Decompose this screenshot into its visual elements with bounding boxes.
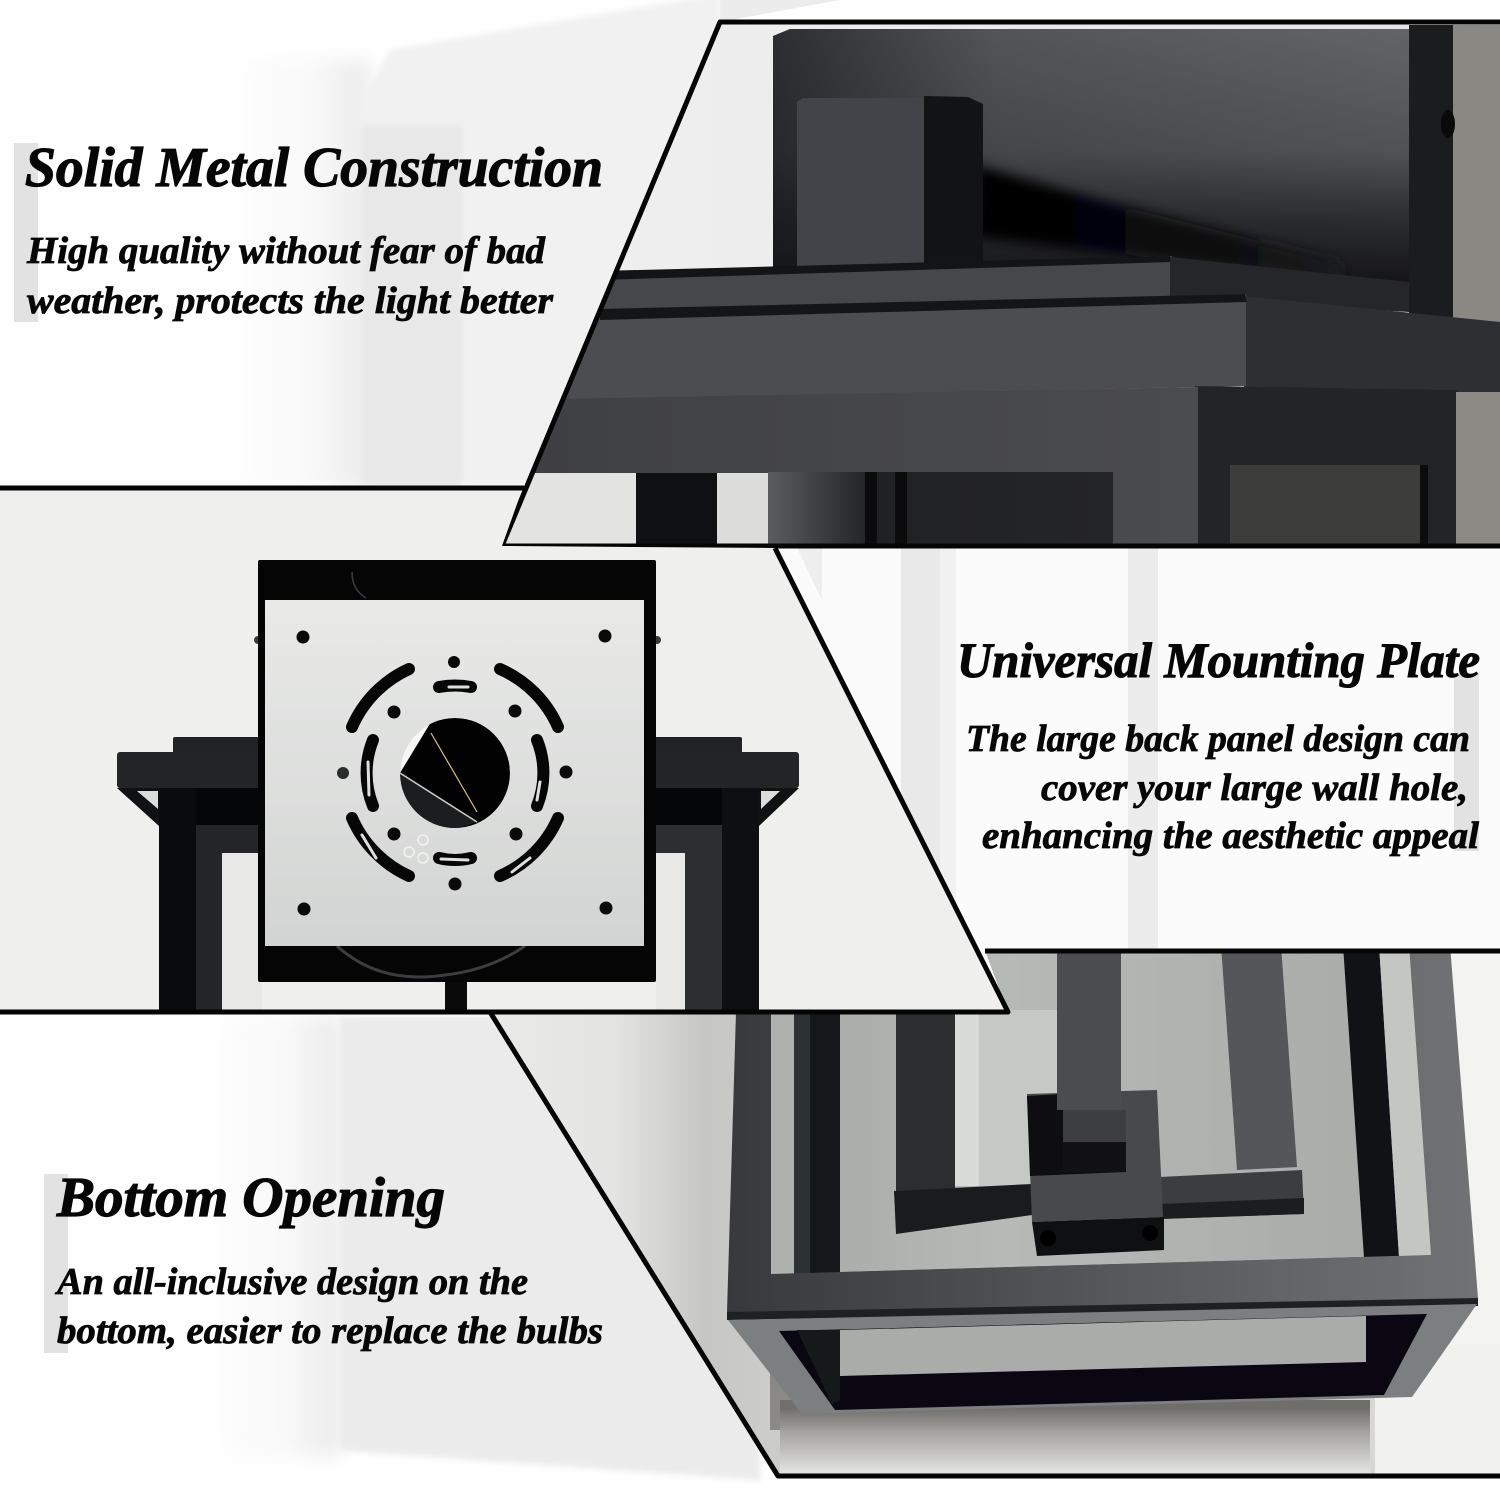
- description: [26, 230, 554, 322]
- heading: Solid Metal Construction: [25, 137, 603, 199]
- lantern body side: [1195, 386, 1500, 552]
- left inner posts: [771, 1010, 840, 1274]
- description: An all-inclusive design on the: [55, 1261, 528, 1303]
- description: [966, 718, 1479, 857]
- arm shadow bar: [983, 161, 1327, 266]
- mounting block: [1027, 1090, 1164, 1256]
- block: universal mounting plate text: [957, 632, 1480, 857]
- rear left bar: [896, 1010, 1059, 1192]
- upper door: [220, 0, 720, 490]
- panel: bottom opening lantern: [480, 945, 1500, 1485]
- description: The large back panel design can: [966, 718, 1470, 760]
- description: High quality without fear of bad: [26, 230, 546, 272]
- block: solid metal construction text: [14, 137, 603, 322]
- lantern roof and frame behind plate: [117, 636, 799, 1014]
- description: weather, protects the light better: [27, 280, 554, 322]
- front frame lower band: [729, 1255, 1476, 1312]
- panel: solid metal construction close-up: [500, 20, 1500, 553]
- plate side edge and wall: [1409, 25, 1500, 322]
- center arm: [1057, 945, 1126, 1172]
- block: bottom opening text: [44, 1167, 603, 1353]
- panel: universal mounting plate text area: [775, 548, 1500, 950]
- description: bottom, easier to replace the bulbs: [57, 1310, 603, 1352]
- description: cover your large wall hole,: [1041, 767, 1468, 809]
- panel border: mounting plate text area: [500, 544, 1500, 548]
- lantern body front: [500, 387, 1198, 553]
- upper roof tier: [590, 256, 1409, 316]
- panel: mounting plate rear view: [0, 488, 1020, 1014]
- description: enhancing the aesthetic appeal: [982, 815, 1479, 857]
- hardware stamp: [404, 835, 428, 863]
- panel border: construction close-up: [502, 22, 1500, 546]
- lantern front frame: [727, 945, 1478, 1312]
- arc slots: [352, 669, 558, 876]
- panel border: plate rear view: [0, 488, 1008, 1012]
- bottom opening: [728, 1304, 1477, 1414]
- heading: Universal Mounting Plate: [957, 632, 1480, 688]
- mounting arm block: [797, 96, 983, 270]
- wires: [337, 572, 525, 977]
- lower roof tier: [560, 294, 1500, 400]
- silver mounting plate: [265, 600, 644, 946]
- crossbar: [894, 1170, 1304, 1234]
- heading: Bottom Opening: [56, 1167, 445, 1229]
- back box: [258, 560, 656, 982]
- divider above bottom lantern: [985, 948, 1500, 954]
- centre hole: [400, 718, 510, 828]
- wall plate: [773, 29, 1409, 300]
- slot reflections: [362, 687, 540, 872]
- description: [55, 1261, 603, 1352]
- glass window: [840, 954, 1412, 1272]
- right inner posts: [1343, 945, 1431, 1258]
- panel border: bottom opening: [490, 1012, 1500, 1476]
- lower door: [200, 1016, 760, 1480]
- floor shadow: [770, 1370, 1370, 1476]
- rear right bar: [1221, 945, 1297, 1170]
